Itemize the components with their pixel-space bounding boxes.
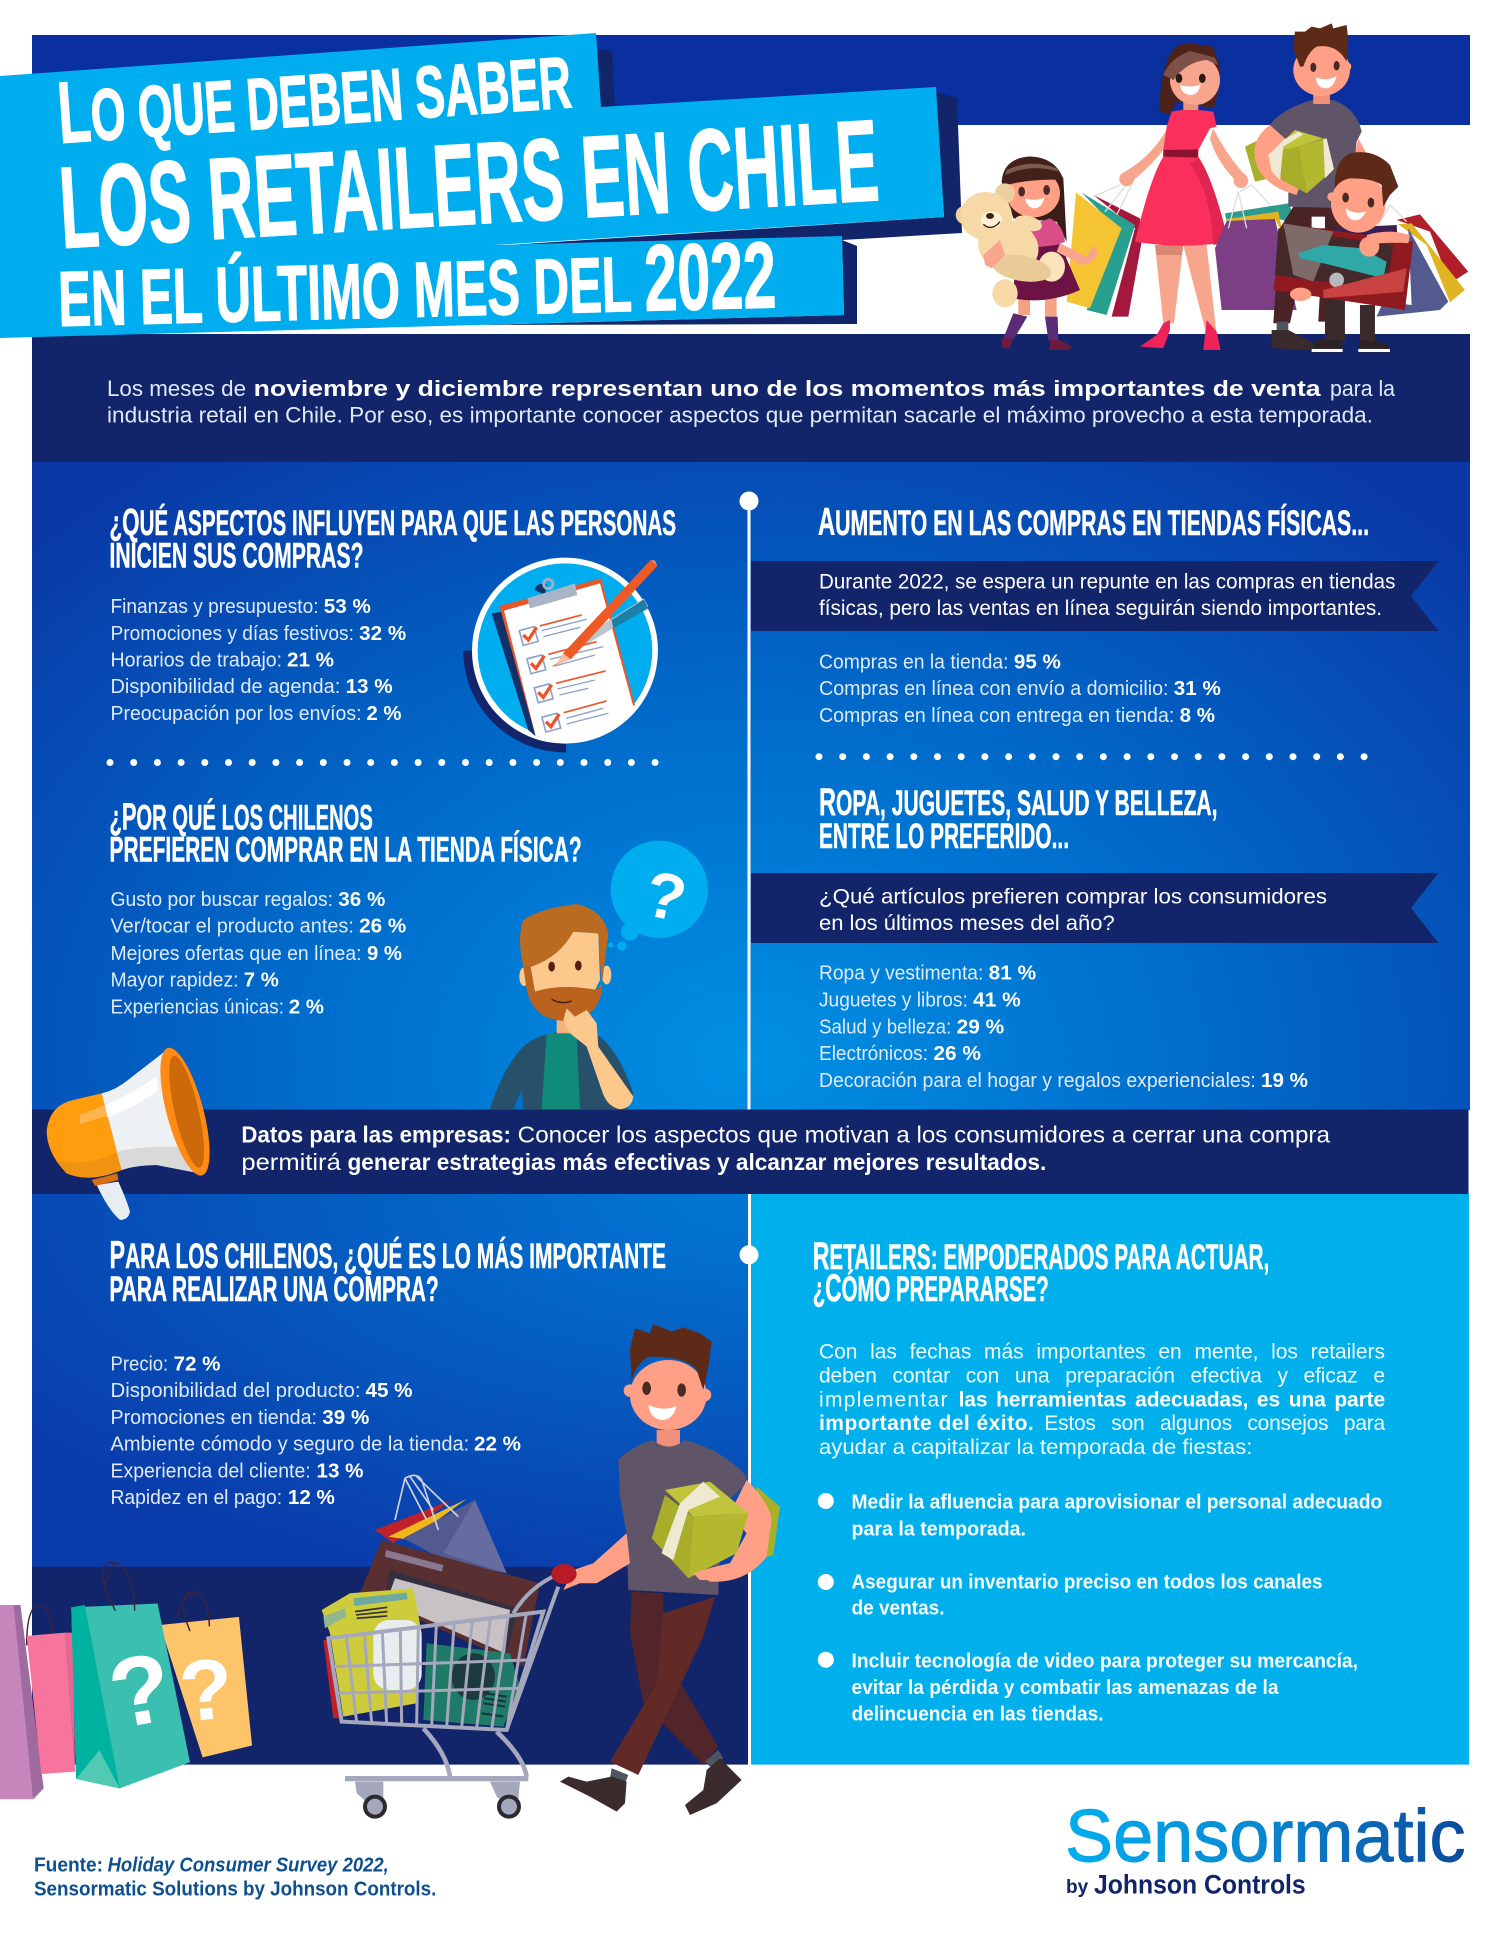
heading: PREFIEREN COMPRAR EN LA TIENDA FÍSICA? — [110, 830, 582, 870]
list: Compras en la tienda: — [819, 651, 1008, 673]
list — [110, 596, 406, 725]
panel: intro band — [32, 334, 1470, 462]
intro text: noviembre y diciembre representan uno de los momentos más importantes de venta — [254, 376, 1322, 401]
panel: lower left navy floor — [32, 1567, 749, 1765]
heading: ¿CÓMO PREPARARSE? — [813, 1267, 1049, 1310]
illustration: question shopping bags: ? — [101, 1632, 180, 1749]
section: what influences purchases — [110, 502, 676, 725]
list: Horarios de trabajo: — [110, 650, 282, 672]
list — [819, 963, 1308, 1092]
tip 3: delincuencia en las tiendas. — [852, 1704, 1104, 1726]
tip 1: Medir la afluencia para aprovisionar el personal adecuado — [852, 1492, 1382, 1514]
paragraph — [819, 1341, 1386, 1459]
list: 7 % — [244, 969, 279, 991]
heading — [110, 1234, 666, 1309]
girl's bags — [1067, 185, 1142, 317]
list: Finanzas y presupuesto: — [110, 596, 318, 618]
list: 2 % — [366, 703, 402, 725]
list: 36 % — [338, 889, 386, 911]
section: most important when buying — [110, 1234, 666, 1509]
list: Compras en línea con entrega en tienda: — [819, 705, 1174, 727]
source note: Fuente: — [34, 1855, 103, 1877]
list: 2 % — [289, 996, 324, 1018]
heading: ¿POR QUÉ LOS CHILENOS — [110, 796, 373, 838]
title banner — [0, 29, 962, 346]
callout band: company data — [32, 1110, 1468, 1194]
list: Rapidez en el pago: — [110, 1487, 282, 1509]
icon: thinking man with question bubble: ? — [639, 856, 693, 936]
list: 9 % — [367, 943, 402, 965]
section: increase in physical store purchases — [751, 501, 1438, 727]
section: why physical store — [110, 796, 582, 1018]
list: Ambiente cómodo y seguro de la tienda: — [110, 1434, 469, 1456]
intro text: para la — [1330, 376, 1396, 401]
list: 72 % — [174, 1354, 221, 1376]
callout band: company data: Datos para las empresas: — [241, 1122, 511, 1148]
heading — [813, 1235, 1269, 1310]
list: Precio: — [110, 1354, 168, 1376]
list: 41 % — [973, 989, 1021, 1011]
list: Gusto por buscar regalos: — [110, 889, 333, 911]
list: Preocupación por los envíos: — [110, 703, 362, 725]
intro text: industria retail en Chile. Por eso, es importante conocer aspectos que permitan sacarle el máximo provecho a esta temporada. — [107, 403, 1373, 428]
paragraph: importante del éxito. — [819, 1412, 1034, 1435]
list — [110, 889, 406, 1018]
callout band: company data: Conocer los aspectos que motivan a los consumidores a cerrar una compra — [518, 1122, 1330, 1148]
list: 95 % — [1014, 651, 1061, 673]
list: 21 % — [287, 650, 334, 672]
heading — [110, 502, 676, 576]
list: 22 % — [474, 1434, 521, 1456]
list: 29 % — [957, 1016, 1004, 1038]
cart contents — [322, 1475, 540, 1727]
icon: megaphone — [47, 1043, 220, 1220]
list: 13 % — [346, 676, 393, 698]
divider dots right — [819, 753, 1365, 760]
list: 8 % — [1180, 705, 1215, 727]
father — [1245, 23, 1367, 350]
cart frame — [328, 1575, 558, 1779]
banner shadow — [480, 49, 962, 325]
cart wheels — [355, 1782, 520, 1817]
icon: thinking man with question bubble — [490, 841, 708, 1109]
list: 32 % — [359, 623, 406, 645]
man walking — [551, 1324, 780, 1815]
list: 26 % — [933, 1043, 981, 1065]
section: retailers empowered — [813, 1235, 1386, 1726]
paragraph: Estos son algunos consejos para — [1044, 1412, 1386, 1435]
list: 45 % — [366, 1380, 413, 1402]
paragraph: ayudar a capitalizar la temporada de fiestas: — [819, 1436, 1252, 1459]
ribbon — [751, 561, 1438, 631]
source note — [34, 1855, 436, 1901]
mother — [1119, 43, 1248, 350]
list: 26 % — [359, 916, 406, 938]
paragraph: deben contar con una preparación efectiva y eficaz e — [819, 1364, 1385, 1388]
banner cyan shape — [0, 33, 944, 338]
right bags — [1377, 205, 1468, 317]
divider dots left — [110, 759, 656, 766]
tip 3: evitar la pérdida y combatir las amenazas de la — [852, 1677, 1279, 1699]
girl — [1002, 157, 1098, 350]
title line 3: EN EL ÚLTIMO MES DEL 2022 — [57, 222, 777, 346]
heading: ENTRE LO PREFERIDO... — [819, 817, 1069, 856]
paragraph: implementar — [819, 1388, 948, 1411]
heading: ¿QUÉ ASPECTOS INFLUYEN PARA QUE LAS PERSONAS — [110, 502, 676, 544]
tip 1 — [818, 1492, 1382, 1540]
heading: PARA REALIZAR UNA COMPRA? — [110, 1270, 439, 1309]
tip 1: para la temporada. — [852, 1518, 1026, 1540]
list: Ropa y vestimenta: — [819, 963, 983, 985]
list: Experiencias únicas: — [110, 996, 284, 1018]
logo: Sensormatic by Johnson Controls: Johnson Controls — [1094, 1870, 1306, 1900]
list: Promociones y días festivos: — [110, 623, 354, 645]
heading: ROPA, JUGUETES, SALUD Y BELLEZA, — [819, 781, 1218, 824]
ribbon — [751, 873, 1438, 943]
intro text: Los meses de — [107, 376, 246, 401]
illustration: man with shopping cart — [322, 1324, 780, 1817]
list: 13 % — [316, 1460, 364, 1482]
list: Mejores ofertas que en línea: — [110, 943, 362, 965]
intro text — [107, 376, 1396, 428]
list — [110, 1354, 521, 1509]
tip 3: Incluir tecnología de video para proteger su mercancía, — [852, 1650, 1358, 1672]
list: 12 % — [288, 1487, 335, 1509]
title line 1: LO QUE DEBEN SABER — [55, 29, 574, 162]
list: Disponibilidad del producto: — [110, 1380, 360, 1402]
heading — [110, 796, 582, 870]
background: top blue band — [32, 35, 1470, 125]
source note: Sensormatic Solutions by Johnson Controls. — [34, 1879, 436, 1901]
logo: Sensormatic by Johnson Controls: by — [1066, 1877, 1089, 1898]
callout band: company data: generar estrategias más efectivas y alcanzar mejores resultados. — [348, 1149, 1046, 1175]
callout band: company data: permitirá — [241, 1149, 341, 1175]
tip 2: Asegurar un inventario preciso en todos los canales — [852, 1571, 1322, 1593]
list: 31 % — [1174, 678, 1221, 700]
tip 2 — [818, 1571, 1322, 1620]
section: preferred products — [751, 781, 1438, 1092]
ribbon: físicas, pero las ventas en línea seguirán siendo importantes. — [819, 597, 1382, 620]
center timeline — [740, 492, 758, 1765]
heading: PARA LOS CHILENOS, ¿QUÉ ES LO MÁS IMPORTANTE — [110, 1234, 666, 1277]
panel: main gradient area — [32, 462, 1470, 1110]
list: 53 % — [324, 596, 371, 618]
list — [819, 651, 1221, 727]
list: Promociones en tienda: — [110, 1407, 317, 1429]
source note: Holiday Consumer Survey 2022, — [108, 1855, 389, 1877]
ribbon: ¿Qué artículos prefieren comprar los consumidores — [819, 886, 1327, 908]
list: Juguetes y libros: — [819, 989, 968, 1011]
list: Salud y belleza: — [819, 1016, 951, 1038]
tip 2: de ventas. — [852, 1598, 944, 1620]
list: Compras en línea con envío a domicilio: — [819, 678, 1168, 700]
logo: Sensormatic by Johnson Controls: Sensormatic — [1065, 1794, 1466, 1877]
heading: INICIEN SUS COMPRAS? — [110, 536, 364, 576]
ribbon: Durante 2022, se espera un repunte en las compras en tiendas — [819, 570, 1395, 594]
list: 39 % — [322, 1407, 370, 1429]
heading — [819, 781, 1218, 856]
illustration: question shopping bags — [0, 1562, 252, 1799]
list: Experiencia del cliente: — [110, 1460, 311, 1482]
list: Electrónicos: — [819, 1043, 928, 1065]
illustration: question shopping bags: ? — [175, 1641, 237, 1740]
icon: clipboard — [463, 558, 658, 753]
illustration: family shopping — [956, 23, 1468, 352]
ribbon: en los últimos meses del año? — [819, 912, 1115, 935]
paragraph: Con las fechas más importantes en mente, los retailers — [819, 1341, 1385, 1364]
list: 19 % — [1261, 1070, 1308, 1092]
paragraph: las herramientas adecuadas, es una parte — [959, 1388, 1385, 1411]
tip 3 — [818, 1650, 1358, 1726]
list: 81 % — [989, 963, 1036, 985]
list: Mayor rapidez: — [110, 969, 238, 991]
list: Decoración para el hogar y regalos experienciales: — [819, 1070, 1256, 1092]
panel: lower right cyan — [751, 1194, 1469, 1765]
purple bag — [1215, 185, 1298, 310]
list: Ver/tocar el producto antes: — [110, 916, 354, 938]
list: Disponibilidad de agenda: — [110, 676, 340, 698]
teddy bear — [956, 183, 1065, 307]
boy with toy car box — [1273, 152, 1413, 352]
panel: lower left gradient — [32, 1194, 749, 1567]
